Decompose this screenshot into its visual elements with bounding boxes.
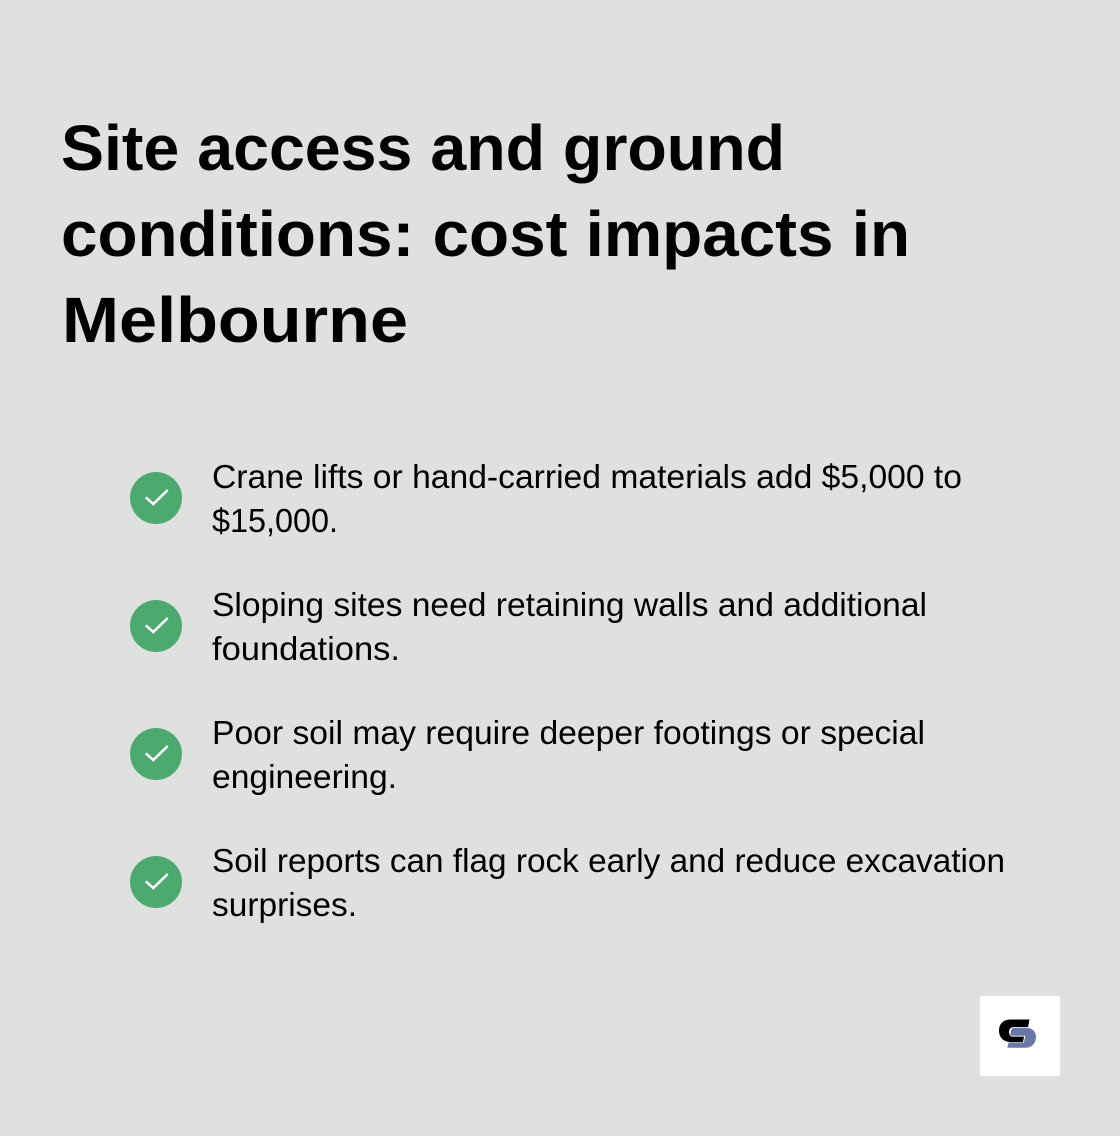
text: sloping sites: foundations. bbox=[212, 630, 400, 667]
list item: crane lifts bbox=[130, 458, 962, 539]
text: poor soil bbox=[212, 714, 925, 795]
title: conditions: cost impacts in bbox=[61, 198, 910, 270]
text: sloping sites bbox=[212, 586, 927, 667]
checklist bbox=[130, 458, 1005, 923]
text: poor soil: engineering. bbox=[212, 758, 397, 795]
list item: poor soil bbox=[130, 714, 925, 795]
text: soil reports: Soil reports can flag rock early and reduce excavation bbox=[212, 842, 1005, 879]
icon: green check bbox=[130, 856, 182, 908]
text: soil reports bbox=[212, 842, 1005, 923]
icon: green check bbox=[130, 472, 182, 524]
text: crane lifts bbox=[212, 458, 962, 539]
list item: sloping sites bbox=[130, 586, 927, 667]
icon: green check bbox=[130, 728, 182, 780]
text: crane lifts: $15,000. bbox=[212, 502, 338, 539]
list item: soil reports bbox=[130, 842, 1005, 923]
text: poor soil: Poor soil may require deeper footings or special bbox=[212, 714, 925, 751]
logo badge bbox=[980, 996, 1060, 1076]
title: Site access and ground bbox=[61, 112, 785, 184]
title: Melbourne bbox=[62, 284, 408, 356]
text: soil reports: surprises. bbox=[212, 886, 357, 923]
text: sloping sites: Sloping sites need retaining walls and additional bbox=[212, 586, 927, 623]
icon: green check bbox=[130, 600, 182, 652]
title bbox=[61, 112, 910, 356]
text: crane lifts: Crane lifts or hand-carried materials add $5,000 to bbox=[212, 458, 962, 495]
